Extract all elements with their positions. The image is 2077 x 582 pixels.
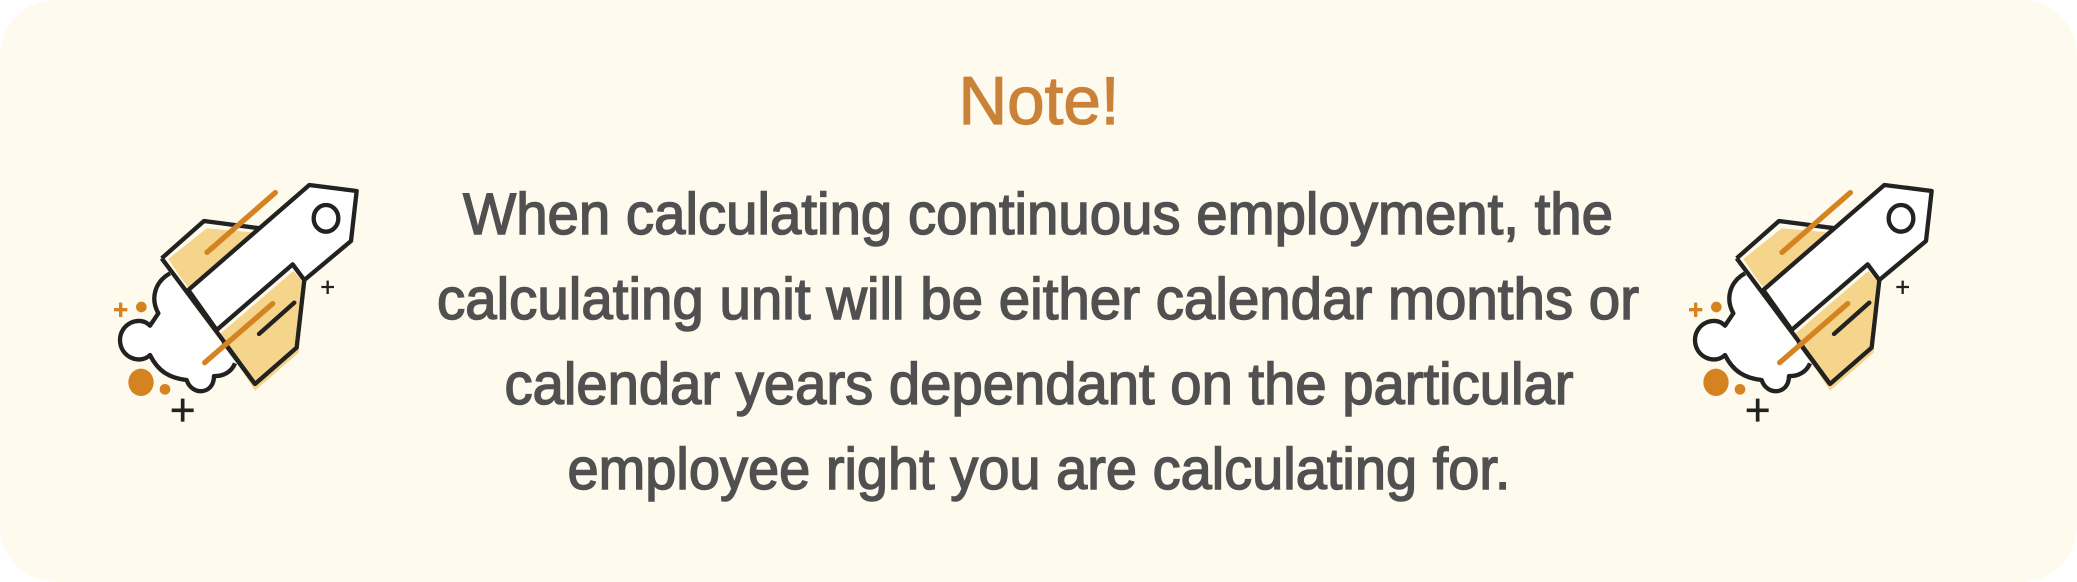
rocket exhaust cloud <box>1695 273 1810 391</box>
upper fin <box>162 221 260 290</box>
motion lines <box>1780 193 1850 363</box>
window <box>1889 205 1913 232</box>
heading: Note!: Note! <box>958 63 1120 139</box>
text block: note body: When calculating continuous employment, the <box>463 182 1613 247</box>
text block: note body <box>437 182 1639 502</box>
upper fin <box>1737 221 1835 290</box>
rocket body <box>1763 185 1932 330</box>
rocket exhaust cloud <box>120 273 235 391</box>
icon: right rocket <box>1689 185 1932 422</box>
sparkles <box>1689 303 1702 317</box>
sparkles <box>114 303 127 317</box>
icon: left rocket <box>114 185 357 422</box>
motion lines <box>205 193 275 363</box>
window <box>314 205 338 232</box>
rocket body <box>188 185 357 330</box>
lower fin <box>218 264 304 384</box>
lower fin <box>1793 264 1879 384</box>
text block: note body: calculating unit will be either calendar months or <box>437 267 1639 332</box>
text block: note body: calendar years dependant on the particular <box>504 352 1574 417</box>
text block: note body: employee right you are calculating for. <box>568 437 1510 502</box>
